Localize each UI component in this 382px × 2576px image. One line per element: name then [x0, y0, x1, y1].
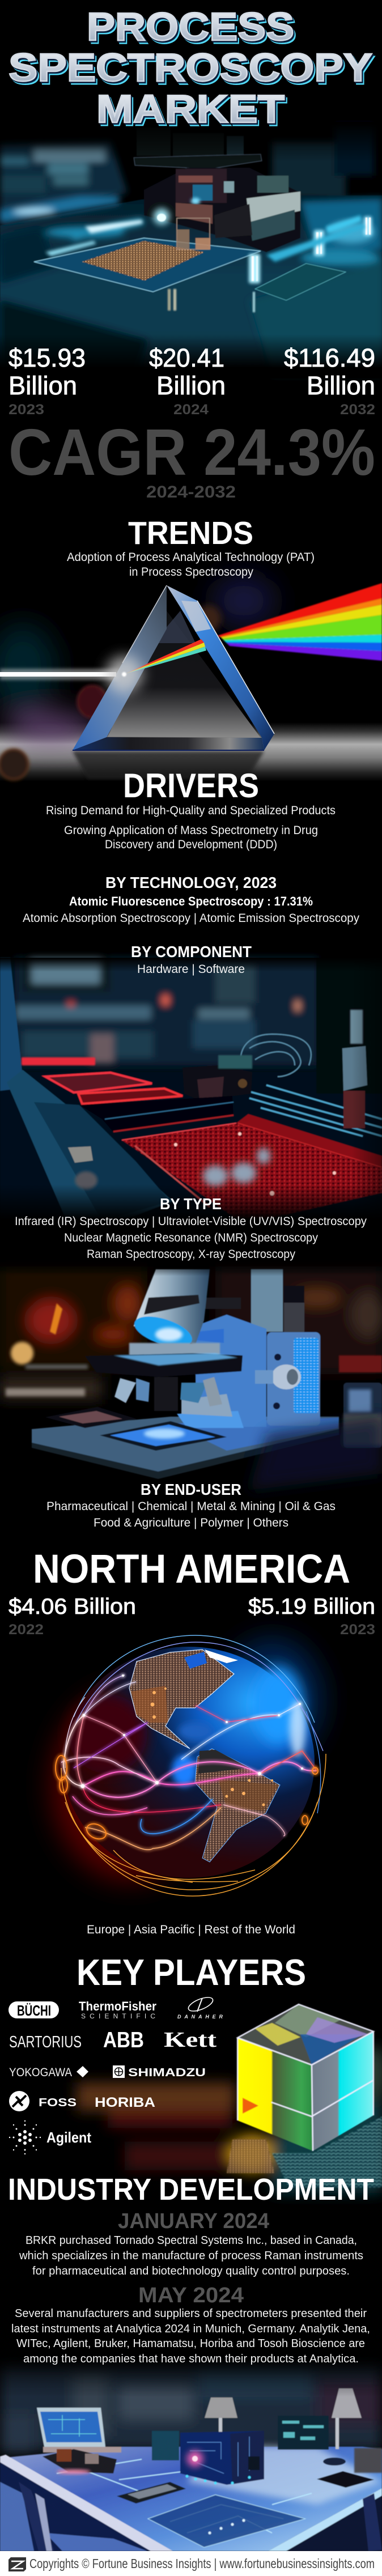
title: MARKET — [97, 88, 286, 133]
prism illustration — [0, 575, 382, 781]
stat 2024 — [149, 343, 226, 418]
logo: Thermo Fisher Scientific — [79, 1999, 156, 2020]
logo: Buchi: BÜCHI — [17, 2002, 51, 2019]
title: PROCESS — [87, 5, 294, 49]
logo: Shimadzu — [113, 2065, 206, 2079]
tall module — [152, 2431, 179, 2460]
under-desk floor — [0, 2459, 382, 2551]
May 2024 text: WITec, Agilent, Bruker, Hamamatsu, Horiba and Tosoh Bioscience are — [16, 2337, 365, 2350]
bottom prism face — [73, 737, 264, 750]
January 2024 text: BRKR purchased Tornado Spectral Systems Inc., based in Canada, — [26, 2234, 357, 2247]
stat 2032: Billion — [307, 371, 375, 400]
by technology: Atomic Absorption Spectroscopy | Atomic Emission Spectroscopy — [23, 912, 359, 925]
steel cylinder — [342, 1010, 367, 1128]
cube right face — [312, 2031, 373, 2151]
logo: Yokogawa: YOKOGAWA — [9, 2066, 72, 2079]
north america land — [129, 1650, 234, 1749]
glowing tubes — [168, 215, 372, 312]
microscope base — [32, 1417, 339, 1472]
stage — [85, 1343, 243, 1377]
side box with screen — [255, 1332, 320, 1426]
city lights — [151, 1687, 273, 1806]
thin internal rainbow — [124, 639, 206, 674]
by technology — [23, 874, 359, 925]
drivers text — [46, 804, 336, 851]
logo: Danaher — [177, 1995, 223, 2020]
by type — [15, 1195, 367, 1261]
drivers text: Growing Application of Mass Spectrometry in Drug — [64, 824, 318, 837]
title: SPECTROSCOPY — [11, 48, 375, 92]
microscope body — [177, 1269, 304, 1428]
desk circuit traces — [57, 2459, 312, 2547]
stat 2032: 2032 — [340, 402, 375, 418]
image: red-lit production line — [0, 958, 382, 1236]
title: MARKET — [99, 90, 287, 134]
stat 2024: 2024 — [173, 402, 209, 418]
title: SPECTROSCOPY — [10, 46, 373, 91]
red circuit board — [122, 1123, 382, 1224]
logo: Foss: FOSS — [39, 2097, 77, 2109]
logo: Sartorius: SARTORIUS — [9, 2033, 82, 2051]
glowing network lines — [61, 1675, 317, 1850]
May 2024 text — [11, 2307, 370, 2365]
sphere — [63, 1647, 315, 1878]
trends heading: TRENDS — [128, 515, 253, 551]
right prism face — [167, 585, 274, 750]
south america land — [195, 1749, 280, 1862]
stat 2023: Billion — [9, 371, 77, 400]
blue tablet — [100, 1421, 227, 1451]
trends text: in Process Spectroscopy — [129, 566, 253, 579]
footer bar — [0, 2551, 382, 2576]
by type: Infrared (IR) Spectroscopy | Ultraviolet-Visible (UV/VIS) Spectroscopy — [15, 1215, 367, 1228]
red book and jar — [339, 1355, 382, 1448]
stat 2032 — [284, 343, 375, 418]
by end-user — [46, 1481, 336, 1529]
bottom image: lab desk with electronics — [0, 2346, 382, 2551]
key players background image — [77, 2046, 382, 2193]
company logos — [9, 1995, 223, 2154]
white light beam — [0, 656, 142, 692]
stat 2023: $15.93 — [9, 343, 86, 372]
black rail — [79, 1096, 234, 1132]
by end-user: Food & Agriculture | Polymer | Others — [94, 1516, 288, 1529]
dark uprights above plate — [137, 127, 244, 156]
left prism face — [73, 585, 167, 750]
left blue pillar — [0, 958, 24, 1091]
north america heading: NORTH AMERICA — [33, 1547, 350, 1592]
glowing electronics cube — [180, 2431, 264, 2485]
CAGR period: 2024-2032 — [146, 483, 236, 501]
logo: Foss — [9, 2091, 77, 2111]
May 2024 text: latest instruments at Analytica 2024 in Munich, Germany. Analytik Jena, — [11, 2323, 370, 2335]
desk lamps — [205, 2388, 362, 2449]
January 2024 text: for pharmaceutical and biotechnology quality control purposes. — [32, 2265, 350, 2277]
key players heading: KEY PLAYERS — [77, 1952, 306, 1993]
prism reflection — [73, 751, 264, 779]
title: SPECTROSCOPY — [9, 45, 372, 90]
May 2024 text: among the companies that have shown their products at Analytica. — [23, 2353, 359, 2365]
globe with network arcs — [51, 1635, 326, 1896]
stat 2024: Billion — [156, 371, 226, 400]
logo: Horiba: HORIBA — [95, 2095, 155, 2110]
trends text: Adoption of Process Analytical Technology (PAT) — [67, 551, 315, 564]
right dark column — [316, 958, 382, 1094]
by type: Raman Spectroscopy, X-ray Spectroscopy — [87, 1248, 295, 1261]
logo: Thermo Fisher Scientific: ThermoFisher — [79, 1999, 156, 2013]
by end-user: BY END-USER — [141, 1481, 241, 1498]
red strips — [22, 1057, 182, 1104]
node points — [80, 1674, 303, 1788]
inner triangle — [108, 611, 261, 738]
objectives — [114, 1377, 222, 1411]
stat 2023: 2023 — [9, 402, 44, 418]
right metal rails — [247, 1085, 382, 1136]
cube left face — [237, 2038, 313, 2151]
market size stats — [9, 343, 375, 418]
blue ring arcs — [65, 1635, 323, 1813]
laptop — [37, 2408, 121, 2452]
by technology: Atomic Fluorescence Spectroscopy : 17.31% — [69, 894, 313, 908]
cube top — [237, 2004, 373, 2065]
small tablet — [45, 1407, 137, 1428]
logo: Kett: Kett — [164, 2028, 217, 2052]
hero image: circuit board machine — [0, 122, 382, 379]
objective head — [131, 1269, 210, 1353]
footer icon — [9, 2557, 26, 2571]
drivers heading: DRIVERS — [123, 767, 259, 805]
north america values: $5.19 Billion — [248, 1595, 375, 1619]
May 2024 date: MAY 2024 — [138, 2284, 244, 2307]
title: PROCESS — [89, 7, 296, 52]
north america values: 2023 — [340, 1622, 375, 1638]
north america values — [9, 1595, 375, 1638]
January 2024 text — [19, 2234, 363, 2277]
by component: BY COMPONENT — [131, 943, 252, 960]
logo: Agilent — [9, 2120, 91, 2154]
north america values: 2022 — [9, 1622, 44, 1638]
title — [9, 5, 375, 134]
title: MARKET — [96, 87, 285, 131]
logo: Shimadzu: SHIMADZU — [128, 2067, 206, 2079]
small circuit board — [117, 2482, 186, 2503]
back board — [278, 2416, 329, 2450]
by component — [131, 943, 252, 976]
by type: BY TYPE — [160, 1195, 222, 1213]
prism cube — [237, 2004, 373, 2151]
image: microscope — [0, 1259, 382, 1490]
logo: Danaher: DANAHER — [177, 2014, 223, 2020]
other regions: Europe | Asia Pacific | Rest of the World — [87, 1923, 295, 1936]
by end-user: Pharmaceutical | Chemical | Metal & Mining | Oil & Gas — [46, 1500, 336, 1513]
left gadget — [43, 2449, 117, 2474]
right clutter — [323, 2448, 382, 2473]
logo: Agilent: Agilent — [46, 2129, 91, 2146]
central america water glow — [172, 1755, 197, 1787]
logo: ABB: ABB — [103, 2028, 144, 2052]
keyboard — [317, 2471, 374, 2488]
blue table — [7, 1070, 173, 1224]
camera box — [182, 1065, 252, 1100]
wide rainbow — [217, 583, 382, 661]
stat 2024: $20.41 — [149, 343, 224, 372]
May 2024 text: Several manufacturers and suppliers of spectrometers presented their — [15, 2307, 367, 2320]
drivers text: Discovery and Development (DDD) — [105, 838, 277, 851]
drivers text: Rising Demand for High-Quality and Specialized Products — [46, 804, 336, 817]
by component: Hardware | Software — [137, 963, 245, 976]
north america values: $4.06 Billion — [9, 1595, 136, 1619]
gold chip — [82, 241, 204, 280]
logo: Thermo Fisher Scientific: SCIENTIFIC — [81, 2012, 155, 2020]
title: PROCESS — [88, 6, 295, 50]
desk top — [0, 2447, 382, 2551]
cables — [240, 1034, 311, 1077]
machine head — [134, 154, 262, 169]
by technology: BY TECHNOLOGY, 2023 — [105, 874, 277, 891]
stat 2023 — [9, 343, 86, 418]
board panel — [34, 238, 261, 292]
trends text — [67, 551, 315, 579]
orange light loops — [56, 1755, 318, 1842]
stat 2032: $116.49 — [284, 343, 375, 372]
desk legs — [19, 2482, 54, 2551]
January 2024 date: JANUARY 2024 — [118, 2209, 269, 2233]
January 2024 text: which specializes in the manufacture of process Raman instruments — [19, 2250, 363, 2262]
by type: Nuclear Magnetic Resonance (NMR) Spectroscopy — [64, 1231, 318, 1244]
orange outer arcs — [61, 1754, 326, 1896]
